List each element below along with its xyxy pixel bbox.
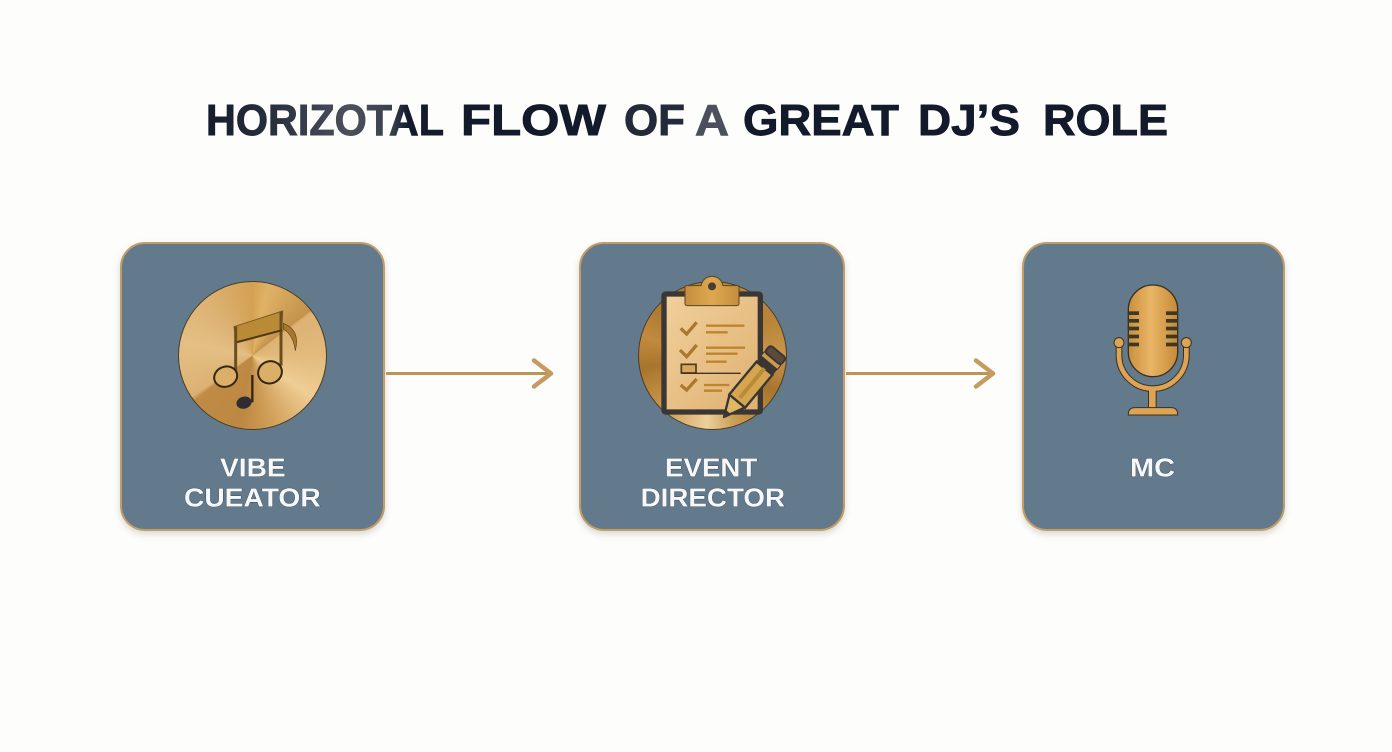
arrow: second — [846, 358, 996, 389]
title: HORIZOTAL — [206, 96, 444, 145]
title — [206, 96, 1168, 145]
title: ROLE — [1043, 96, 1168, 145]
icon: gold disc — [178, 281, 327, 430]
label: vibe cueator: CUEATOR — [184, 483, 321, 513]
title: A — [695, 96, 729, 145]
title: OF — [624, 96, 685, 145]
panel: event director — [579, 242, 845, 531]
title: GREAT — [743, 96, 899, 145]
icon: gold disc — [638, 281, 787, 430]
icon: clipboard and pencil — [661, 276, 786, 418]
label: vibe cueator: VIBE — [220, 453, 286, 483]
label: vibe cueator — [184, 453, 321, 513]
title: DJ’S — [918, 96, 1020, 145]
title: FLOW — [461, 96, 607, 145]
arrow: first — [386, 358, 554, 389]
panel: mc — [1022, 242, 1285, 531]
label: mc: MC — [1130, 453, 1175, 483]
panel: vibe curator — [120, 242, 385, 531]
label: event director: DIRECTOR — [641, 483, 785, 513]
label: event director — [641, 453, 785, 513]
icon: microphone — [1114, 284, 1192, 416]
label: event director: EVENT — [665, 453, 757, 483]
icon: music notes — [213, 310, 297, 409]
